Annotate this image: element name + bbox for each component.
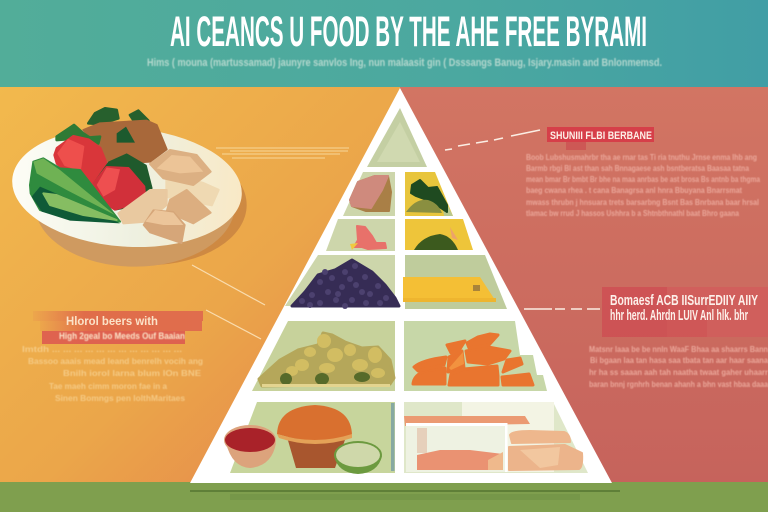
right salmon background (400, 87, 768, 483)
row 5 right panel: carrot sticks (404, 321, 547, 391)
left callout (22, 311, 203, 403)
right callout 1 (526, 127, 760, 218)
callout 2 heading (602, 287, 768, 337)
left callout body text: Imtdh ... ... ... ... ... ... ... ... ... ... ... ... (22, 344, 182, 354)
subtitle: Hims ( mouna (martussamad) jaunyre sanvlos Ing, nun malaasit gin ( Dsssangs Banug, Isjary.masin and Bnlonmemsd. (147, 57, 662, 69)
left callout body text: Sinen Bomngs pen lolthMaritaes (55, 393, 185, 403)
pyramid apex panel (367, 108, 427, 167)
tomatoes (55, 125, 153, 211)
row 3 right panel: greens on yellow (405, 219, 473, 250)
left orange background (0, 87, 400, 483)
row 2 right panel: greens on yellow (405, 172, 453, 216)
row 4 left panel: blueberries (285, 255, 399, 309)
left callout body text: Bnilh iorol larna blum lOn BNE (63, 368, 201, 378)
callout 1 heading (547, 127, 654, 150)
right callout 2 (589, 287, 768, 389)
food pyramid (190, 88, 612, 483)
row 4 right panel: yellow box (403, 255, 507, 309)
lime bowl (334, 441, 382, 474)
muffin (277, 405, 352, 468)
plate (8, 120, 247, 267)
plate of food illustration (8, 108, 247, 267)
left callout body text (22, 344, 203, 403)
right callout 2 leader line (524, 308, 600, 310)
left callout body text: Tae maeh cimm moron fae in a (49, 381, 167, 391)
left callout heading band (33, 311, 203, 344)
row 6 right panel: glass container and bread (404, 402, 588, 473)
left callout heading band: Hlorol beers with (66, 314, 158, 328)
callout 1 heading: SHUNIII FLBI BERBANE (550, 130, 652, 142)
right callout 1 leader line (445, 130, 540, 150)
callout 2 body text (589, 345, 768, 389)
row 3 left panel: fruit (326, 219, 395, 251)
row 6 left panel: bowl, muffin, lime (224, 402, 395, 474)
callout 1 body text: baeg cwana rhea . t cana Banagrsa anl hnra Bbuyana Bnarrsmat (526, 186, 742, 195)
header banner (0, 0, 768, 87)
tan bread and chicken pieces (118, 150, 218, 243)
green vegetables (30, 158, 120, 223)
left callout leader lines (192, 265, 265, 339)
bottom green ground strip (0, 482, 768, 512)
red bowl (224, 425, 276, 468)
left callout body text: Bassoo aaais mead leand benrelh vocih ang (28, 356, 203, 366)
left callout heading band: High 2geal bo Meeds Ouf Baaian (59, 331, 185, 342)
decorative speed lines near plate (216, 148, 349, 158)
row 2 left panel: ham (343, 172, 395, 216)
pyramid white frame (190, 88, 612, 483)
meat slab (83, 108, 167, 164)
callout 1 body text (526, 153, 760, 218)
row 5 left panel: grains pile (252, 321, 395, 391)
